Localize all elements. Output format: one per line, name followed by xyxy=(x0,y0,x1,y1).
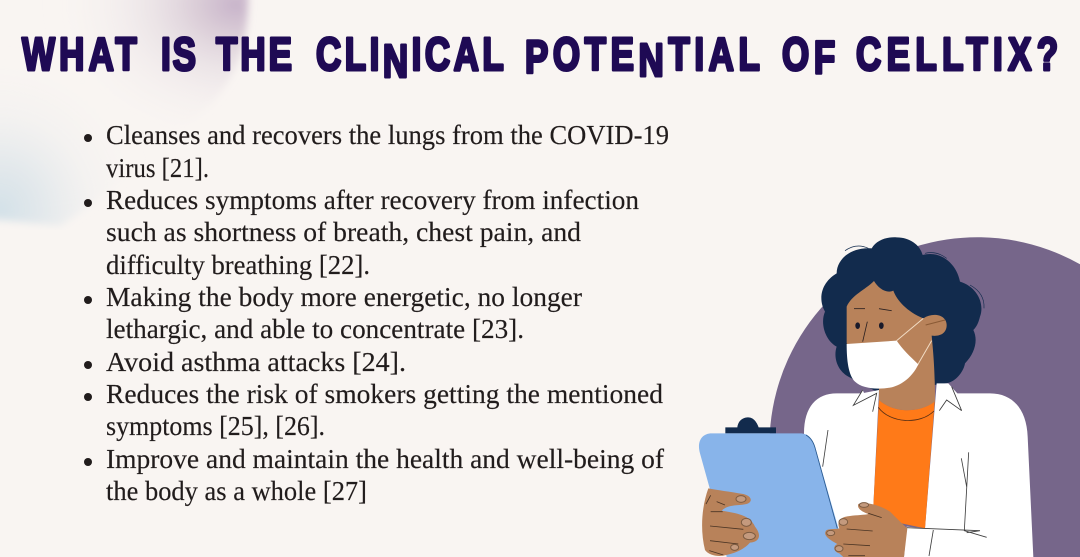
bullet 1: virus [21]. xyxy=(106,153,209,183)
blurred gradient blob xyxy=(0,0,260,230)
hair strands xyxy=(845,246,984,308)
title: CELLTIX? xyxy=(856,28,1058,80)
title: OTE xyxy=(553,28,634,80)
purple circle backdrop xyxy=(769,237,1080,557)
lab coat xyxy=(804,383,1033,557)
left hand xyxy=(702,488,759,556)
bullet 5: Reduces the risk of smokers getting the mentioned xyxy=(106,379,664,409)
shirt neckline xyxy=(878,407,934,421)
title: THE xyxy=(216,28,292,80)
title: F xyxy=(814,31,835,83)
bullet 5: symptoms [25], [26]. xyxy=(106,411,325,441)
orange shirt xyxy=(873,400,935,528)
title: N xyxy=(383,35,408,87)
eyebrows xyxy=(854,309,892,311)
title: WHAT xyxy=(22,28,137,80)
title xyxy=(22,28,1058,87)
illustration: doctor with mask and clipboard xyxy=(699,237,1033,557)
ear line xyxy=(926,320,945,325)
right hand xyxy=(825,503,907,557)
face and neck xyxy=(847,281,947,410)
bullet 2: Reduces symptoms after recovery from infection xyxy=(106,185,639,215)
eyes and nose xyxy=(855,322,884,342)
bullet list xyxy=(84,120,669,506)
bullet 6: Improve and maintain the health and well-being of xyxy=(106,444,664,474)
bullet 6 xyxy=(84,444,664,506)
title: IS xyxy=(161,28,196,80)
bullet 2: such as shortness of breath, chest pain, and xyxy=(106,217,581,247)
clipboard xyxy=(699,433,847,557)
title: P xyxy=(525,31,548,83)
clipboard edge xyxy=(806,435,837,528)
mask xyxy=(847,318,932,389)
bullet 3: lethargic, and able to concentrate [23]. xyxy=(106,314,524,344)
title: CLI xyxy=(316,28,379,80)
clipboard clip xyxy=(725,417,776,433)
bullet 1 xyxy=(84,120,669,183)
bullet 1: Cleanses and recovers the lungs from the COVID-19 xyxy=(106,120,669,150)
title: O xyxy=(782,28,809,80)
bullet 4: Avoid asthma attacks [24]. xyxy=(106,347,406,377)
bullet 5 xyxy=(84,379,664,441)
title: N xyxy=(639,34,664,86)
title: TIAL xyxy=(668,28,760,80)
bullet 3 xyxy=(84,282,582,344)
bullet 2 xyxy=(84,185,639,280)
title: ICAL xyxy=(412,28,504,80)
bullet 2: difficulty breathing [22]. xyxy=(106,250,370,280)
coat seams xyxy=(823,430,987,556)
hair xyxy=(821,237,981,393)
bullet 6: the body as a whole [27] xyxy=(106,476,367,506)
bullet 3: Making the body more energetic, no longer xyxy=(106,282,582,312)
collar xyxy=(853,387,962,412)
